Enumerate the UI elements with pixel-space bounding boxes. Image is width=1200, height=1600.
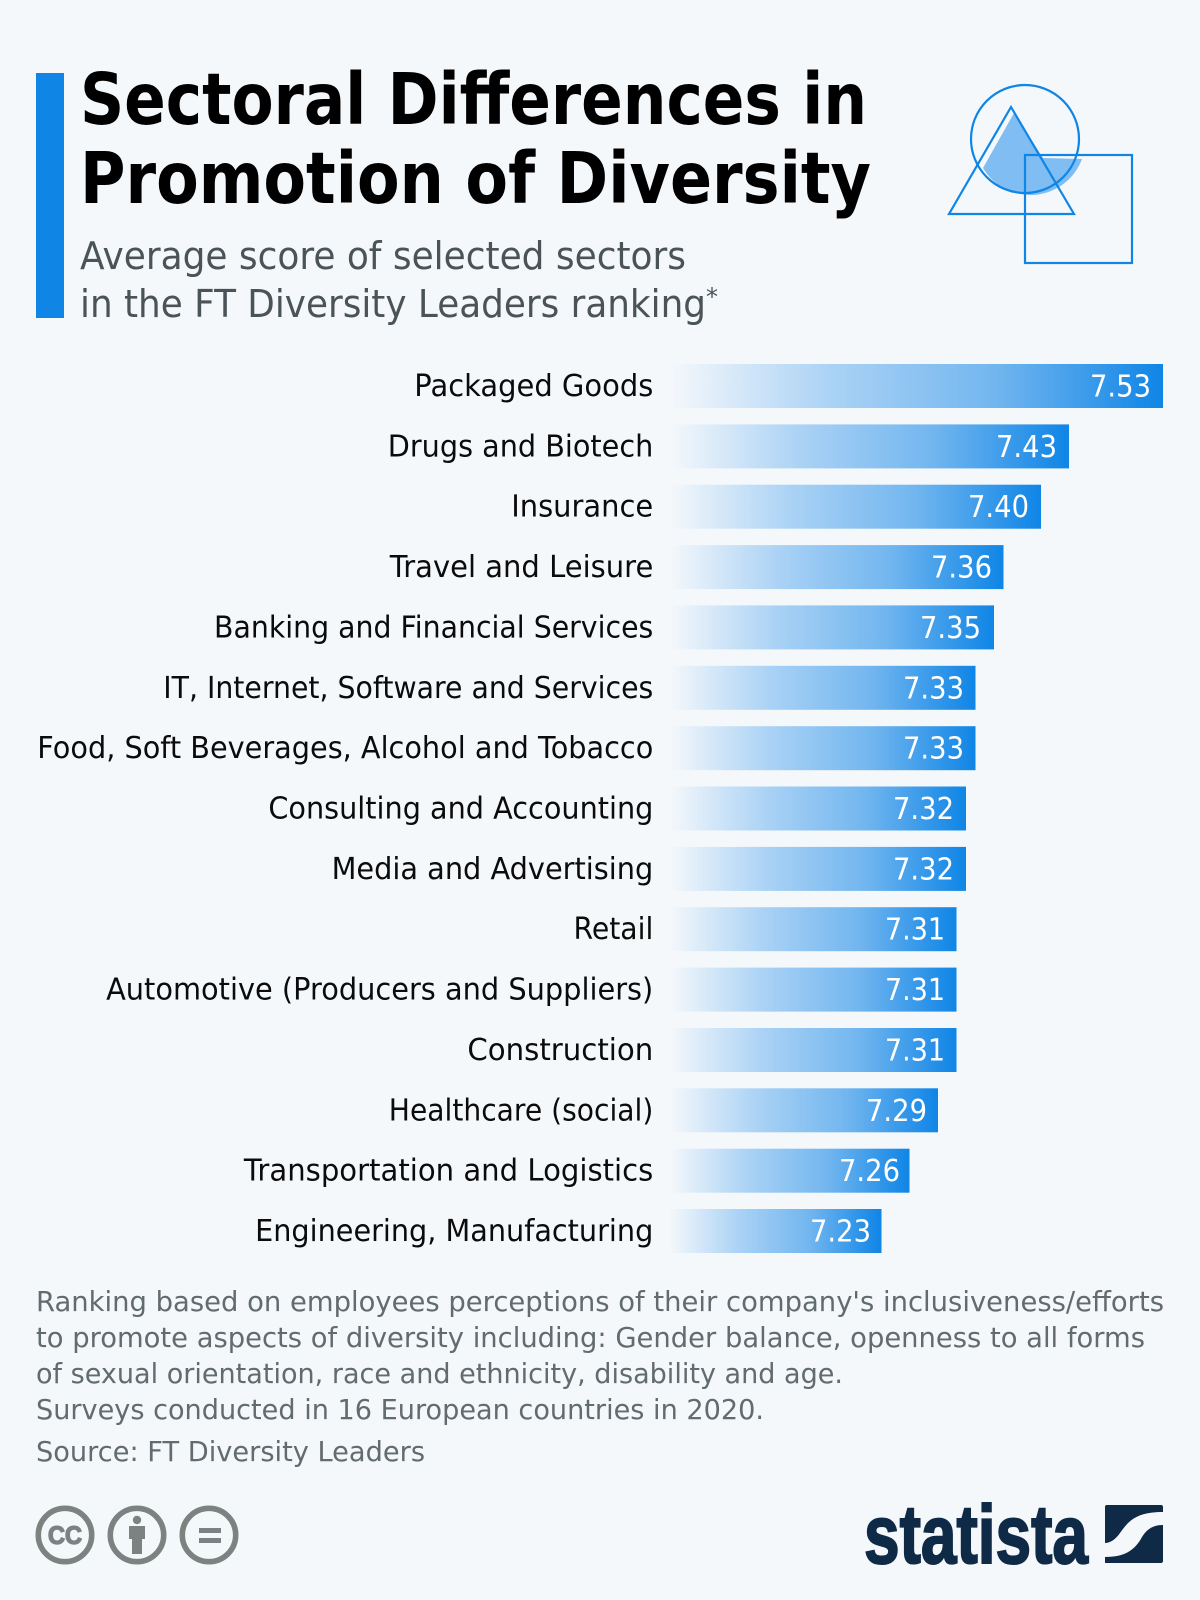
row: Packaged Goods: Packaged Goods xyxy=(414,369,653,404)
row: Media and Advertising: Media and Advertising xyxy=(332,852,653,887)
row: IT, Internet, Software and Services: 7.33 xyxy=(903,671,964,706)
row: Consulting and Accounting: 7.32 xyxy=(893,792,954,827)
row: Engineering, Manufacturing xyxy=(255,1209,882,1253)
row: Retail xyxy=(574,907,956,951)
title: Sectoral Differences in xyxy=(80,58,867,141)
row: Packaged Goods: 7.53 xyxy=(1090,370,1151,404)
icon: creative commons licence: CC xyxy=(48,1522,82,1550)
row: Construction xyxy=(467,1028,956,1072)
footnote: of sexual orientation, race and ethnicity, disability and age. xyxy=(36,1358,843,1390)
row: Travel and Leisure xyxy=(389,545,1003,589)
row: Insurance: Insurance xyxy=(511,490,653,525)
row: Banking and Financial Services: Banking and Financial Services xyxy=(214,610,653,645)
statista logo: statista xyxy=(864,1488,1089,1581)
footnote: Surveys conducted in 16 European countries in 2020. xyxy=(36,1394,764,1426)
row: Banking and Financial Services xyxy=(214,605,994,649)
row: Packaged Goods xyxy=(414,364,1163,408)
row: Healthcare (social): 7.29 xyxy=(866,1094,927,1129)
row: Engineering, Manufacturing: 7.23 xyxy=(810,1214,871,1250)
subtitle: * xyxy=(706,283,718,311)
footnote: to promote aspects of diversity including: Gender balance, openness to all forms xyxy=(36,1322,1145,1354)
row: Construction: Construction xyxy=(467,1033,653,1068)
accent bar xyxy=(36,73,64,318)
row: Construction: 7.31 xyxy=(885,1034,945,1068)
footnote xyxy=(36,1286,1164,1426)
row: Healthcare (social): Healthcare (social) xyxy=(389,1093,653,1128)
row: Travel and Leisure: 7.36 xyxy=(931,551,992,586)
title xyxy=(80,58,871,220)
row: Automotive (Producers and Suppliers): 7.31 xyxy=(885,973,945,1008)
row: IT, Internet, Software and Services: IT, Internet, Software and Services xyxy=(163,671,653,706)
row: Transportation and Logistics xyxy=(243,1149,910,1193)
row: IT, Internet, Software and Services xyxy=(163,666,976,710)
row: Food, Soft Beverages, Alcohol and Tobacco xyxy=(37,726,976,770)
row: Drugs and Biotech xyxy=(388,424,1069,468)
row: Insurance xyxy=(511,485,1041,529)
row: Automotive (Producers and Suppliers): Automotive (Producers and Suppliers) xyxy=(106,973,653,1008)
title: Promotion of Diversity xyxy=(80,137,871,220)
row: Food, Soft Beverages, Alcohol and Tobacco: 7.33 xyxy=(903,732,964,767)
icon: creative commons licence xyxy=(38,1508,236,1562)
subtitle: in the FT Diversity Leaders ranking xyxy=(80,282,706,326)
row: Consulting and Accounting: Consulting and Accounting xyxy=(268,792,653,826)
row: Consulting and Accounting xyxy=(268,786,966,830)
source: Source: FT Diversity Leaders xyxy=(36,1436,425,1468)
subtitle: Average score of selected sectors xyxy=(80,234,686,278)
row: Transportation and Logistics: 7.26 xyxy=(839,1154,900,1189)
bar chart xyxy=(37,364,1163,1253)
icon: geometric shapes xyxy=(949,85,1132,263)
row: Healthcare (social) xyxy=(389,1088,938,1132)
row: Media and Advertising: 7.32 xyxy=(893,852,954,887)
row: Automotive (Producers and Suppliers) xyxy=(106,968,957,1012)
row: Drugs and Biotech: 7.43 xyxy=(996,430,1057,465)
subtitle xyxy=(80,234,718,326)
row: Drugs and Biotech: Drugs and Biotech xyxy=(388,429,653,464)
row: Transportation and Logistics: Transportation and Logistics xyxy=(243,1154,653,1189)
row: Media and Advertising xyxy=(332,847,966,891)
footnote: Ranking based on employees perceptions of their company's inclusiveness/efforts xyxy=(36,1286,1164,1318)
row: Retail: 7.31 xyxy=(885,913,945,948)
row: Retail: Retail xyxy=(574,912,653,947)
row: Insurance: 7.40 xyxy=(968,490,1029,525)
row: Food, Soft Beverages, Alcohol and Tobacco: Food, Soft Beverages, Alcohol and Tobacco xyxy=(37,731,653,766)
row: Travel and Leisure: Travel and Leisure xyxy=(389,550,653,585)
row: Engineering, Manufacturing: Engineering, Manufacturing xyxy=(255,1214,653,1249)
row: Banking and Financial Services: 7.35 xyxy=(920,611,981,646)
